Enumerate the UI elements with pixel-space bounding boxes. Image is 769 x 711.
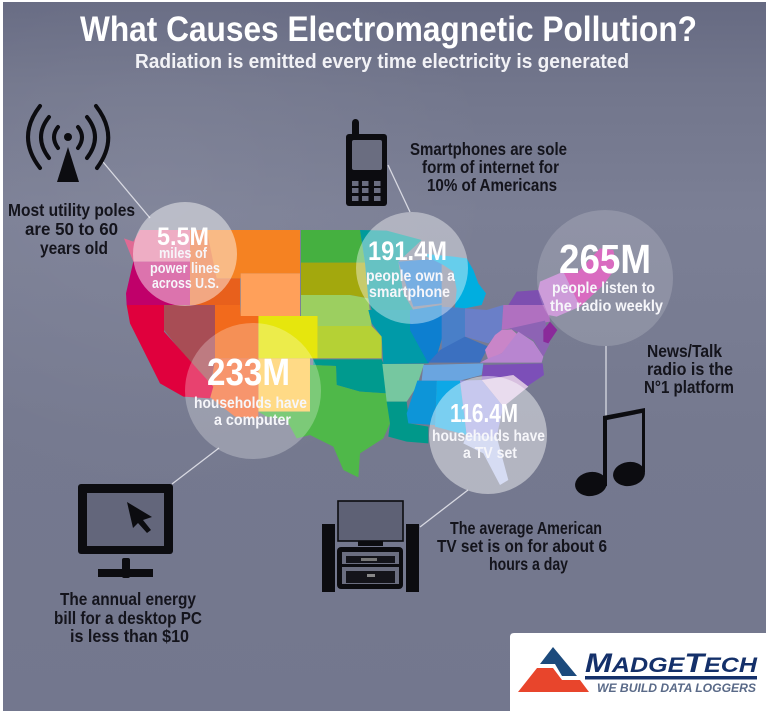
logo panel: MadgeTech [510,633,769,711]
stat circle: TV: households have [432,428,545,445]
title: What Causes Electromagnetic Pollution? [80,10,697,49]
text: desktop PC: is less than $10 [70,626,189,646]
stat circle: radio: the radio weekly [550,298,663,315]
icon: music notes [573,408,647,498]
stat circle: power lines: 5.5M [157,223,209,251]
stat circle: smartphones: 191.4M [368,236,447,266]
text: utility poles: years old [40,238,108,258]
subtitle: Radiation is emitted every time electricity is generated [135,51,629,73]
text: desktop PC [54,589,202,646]
stat circle: radio: 265M [559,236,651,282]
stat circle: power lines: power lines [150,260,220,277]
stat circle: radio [537,210,673,346]
stat circle: computers [185,323,321,459]
text: TV set usage [437,518,607,574]
logo panel: MadgeTech: WE BUILD DATA LOGGERS [597,683,756,695]
icon: TV and stereo cabinet [322,501,419,592]
US map [124,230,617,485]
text: news talk radio: radio is the [647,359,733,379]
stat circle: power lines [133,202,237,306]
text: TV set usage: The average American [450,518,602,538]
stat circle: power lines: across U.S. [152,275,219,292]
text: desktop PC: The annual energy [60,589,196,609]
text: TV set usage: TV set is on for about 6 [437,536,607,556]
stat circle: power lines: miles of [159,245,208,262]
text: utility poles [8,200,135,258]
icon: mobile phone [346,119,387,206]
stat circle: computers: 233M [207,352,290,394]
stat circle: computers: a computer [214,412,291,429]
stat circle: smartphones: people own a [366,268,455,285]
connector lines [103,162,606,527]
logo panel: MadgeTech: MADGE TECH [585,648,758,678]
icon: broadcast antenna [28,106,108,182]
text: TV set usage: hours a day [489,554,568,574]
text: news talk radio: N°1 platform [644,377,734,397]
stat circle: TV: 116.4M [450,398,518,428]
text: news talk radio: News/Talk [647,341,722,361]
stat circle: TV: a TV set [463,445,518,462]
text: utility poles: Most utility poles [8,200,135,220]
stat circle: smartphones: smartphone [369,284,450,301]
text: smartphones: form of internet for [422,157,559,177]
text: utility poles: are 50 to 60 [25,219,118,239]
text: smartphones: 10% of Americans [427,175,557,195]
text: smartphones [410,139,567,195]
icon: desktop monitor [78,484,173,578]
stat circle: TV [429,376,547,494]
stat circle: smartphones [356,212,468,324]
text: smartphones: Smartphones are sole [410,139,567,159]
text: news talk radio [644,341,734,397]
stat circle: radio: people listen to [552,280,655,297]
text: desktop PC: bill for a desktop PC [54,608,202,628]
stat circle: computers: households have [194,395,307,412]
